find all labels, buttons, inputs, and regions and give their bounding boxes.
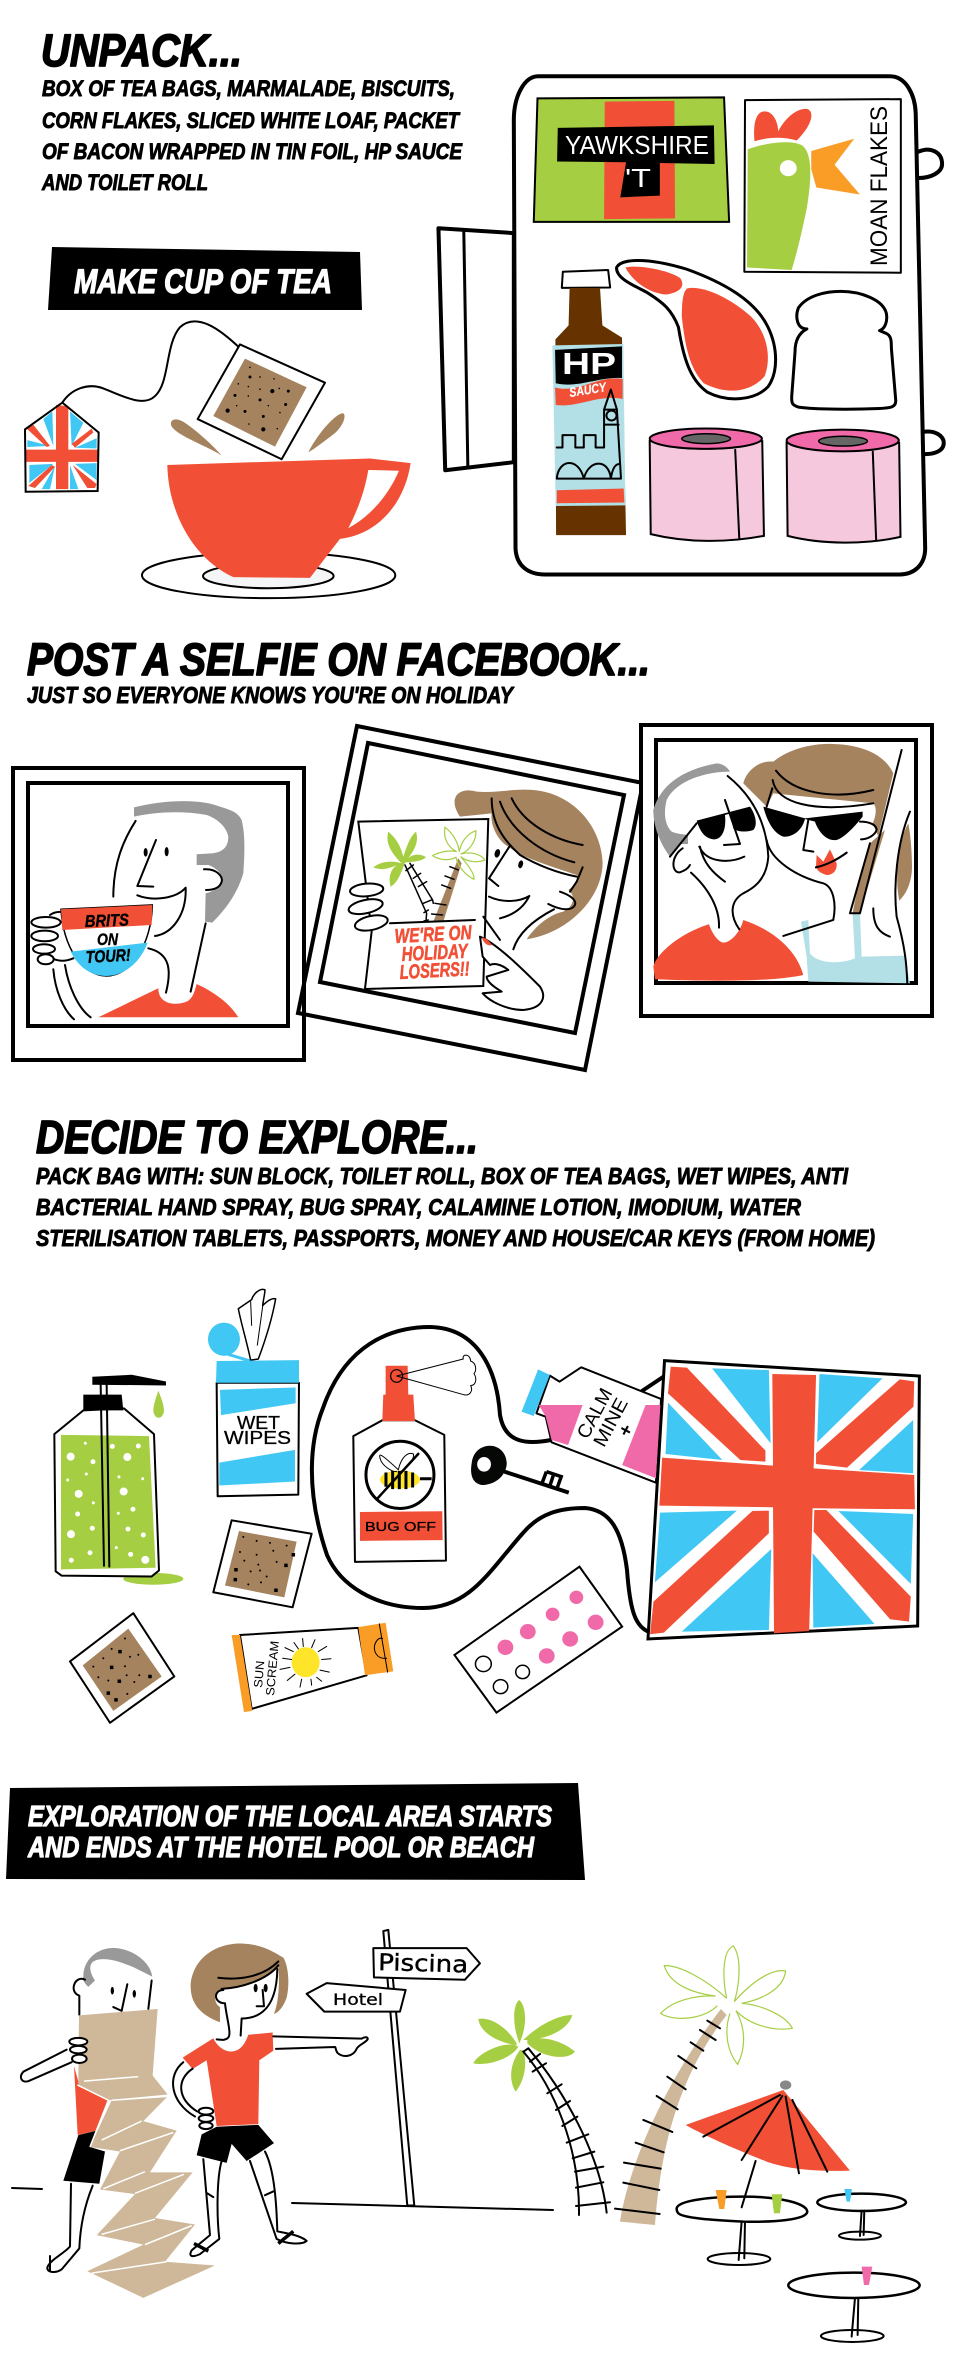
woman arms [173, 2036, 368, 2129]
heading: unpack: UNPACK... [41, 25, 242, 76]
icon: tea bag [198, 344, 325, 459]
illustration: tourists with map and signpost [21, 1930, 480, 2298]
subheading: selfie: JUST SO EVERYONE KNOWS YOU'RE ON HOLIDAY [27, 682, 515, 708]
man legs [47, 2184, 93, 2272]
table two [817, 2189, 906, 2240]
icon: sun cream tube [232, 1623, 393, 1712]
icon: union jack bag [648, 1361, 919, 1639]
photo: woman holding holiday card [298, 726, 643, 1070]
icon: hand sanitiser [54, 1375, 183, 1585]
icon: saucer [142, 552, 395, 598]
man head [83, 1948, 152, 1987]
suitcase body [514, 76, 925, 574]
icon: calamine lotion [522, 1367, 661, 1483]
speech line: looping outline from flag [312, 1327, 663, 1631]
woman top [801, 913, 910, 983]
cup slogan: TOUR! [85, 946, 131, 967]
woman shirt [183, 2033, 273, 2126]
woman hair [743, 744, 893, 837]
icon: tea splash left [171, 419, 222, 455]
man hand and arm [31, 912, 91, 1019]
table three [788, 2267, 920, 2342]
text block: unpack list [41, 76, 463, 195]
text block: unpack list: AND TOILET ROLL [41, 170, 208, 195]
icon: tea bag on floor [213, 1520, 312, 1607]
couple face lines [670, 750, 910, 983]
label: calm mine [573, 1385, 638, 1451]
label: wet wipes: WIPES [224, 1428, 291, 1448]
icon: house key [471, 1446, 569, 1493]
palm tree outline trunk [473, 2000, 610, 2215]
parasol [686, 2080, 850, 2207]
icon: spray bottle [353, 1355, 476, 1562]
signpost [307, 1930, 480, 2205]
label: calm mine: + [614, 1421, 638, 1441]
bottle: hp sauce [552, 270, 626, 535]
man hair [653, 763, 730, 857]
card message: WE'RE ON [394, 922, 473, 948]
man with map [21, 1948, 215, 2298]
box: yawkshire tea background [534, 97, 729, 222]
suitcase handle [438, 228, 514, 470]
man arm and hand [21, 2038, 87, 2082]
sign label: piscina: Piscina [378, 1950, 468, 1978]
icon: tea bag string [62, 321, 240, 403]
cup slogan: BRITS [84, 910, 130, 931]
label: yawkshire tea: 'T [625, 163, 651, 193]
banner: exploration of the local area: EXPLORATION OF THE LOCAL AREA STARTS [28, 1801, 553, 1833]
banner: make cup of tea: MAKE CUP OF TEA [74, 263, 332, 301]
heading: post a selfie: POST A SELFIE ON FACEBOOK... [27, 634, 650, 685]
label: yawkshire tea: YAWKSHIRE [565, 130, 709, 160]
illustration: cup of tea with tea bag [25, 321, 411, 598]
man sunglasses [697, 807, 756, 839]
icon: wet wipes [208, 1289, 299, 1496]
card message [394, 922, 473, 984]
text block: pack bag list [36, 1163, 875, 1251]
icon: union jack tea tag [25, 403, 99, 492]
label: wet wipes [224, 1413, 291, 1448]
man shirt [74, 2066, 108, 2135]
box: moan flakes [744, 99, 901, 273]
woman sunglasses [763, 807, 863, 840]
label: saucy: SAUCY [568, 379, 608, 400]
card message: LOSERS!! [399, 958, 470, 984]
text block: pack bag list: BACTERIAL HAND SPRAY, BUG SPRAY, CALAMINE LOTION, IMODIUM, WATER [36, 1194, 801, 1220]
photo: man with brits on tour cup [13, 768, 304, 1060]
cup slogan [84, 910, 131, 967]
banner: make cup of tea [48, 247, 362, 310]
icon: blister pack [454, 1567, 622, 1713]
icon: tea splash right [308, 413, 345, 452]
woman right hand over card [480, 917, 543, 1010]
photo: couple in sunglasses [641, 725, 932, 1016]
label: calm mine: MINE [590, 1395, 633, 1451]
ground line [12, 2188, 553, 2210]
illustration: open suitcase [438, 76, 944, 574]
woman legs [190, 2152, 307, 2256]
text block: pack bag list: PACK BAG WITH: SUN BLOCK, TOILET ROLL, BOX OF TEA BAGS, WET WIPES, ANTI [36, 1163, 849, 1189]
woman hair [455, 790, 603, 939]
illustration: bag items right [454, 1361, 919, 1713]
palm tree tan trunk [615, 1946, 792, 2225]
label: sun scream: SCREAM [263, 1640, 282, 1696]
text block: unpack list: OF BACON WRAPPED IN TIN FOIL, HP SAUCE [42, 139, 463, 164]
banner: exploration of the local area: AND ENDS AT THE HOTEL POOL OR BEACH [27, 1832, 535, 1864]
label: yawkshire tea [565, 130, 709, 193]
icon: tea bag lower left [70, 1613, 174, 1723]
man hair [134, 801, 244, 923]
food: bacon [617, 260, 776, 399]
palm trees on card [373, 827, 485, 923]
label: bug off: BUG OFF [365, 1519, 436, 1534]
man shirt [98, 984, 238, 1017]
folded map [77, 2009, 215, 2298]
food: toilet roll two [787, 430, 900, 543]
icon: red tea cup [167, 458, 411, 578]
illustration: bag items left [54, 1289, 476, 1723]
card message: HOLIDAY [401, 941, 469, 966]
man face lines [113, 821, 222, 993]
cup with flag bands [61, 905, 152, 976]
woman face lines [489, 798, 583, 949]
woman hair [191, 1944, 288, 2022]
table one [677, 2190, 807, 2265]
label: moan flakes: MOAN FLAKES [866, 106, 893, 266]
label: hp: HP [562, 346, 616, 381]
left hand fingers [347, 882, 389, 933]
food: sliced bread [792, 291, 896, 409]
woman pointing [173, 1944, 368, 2256]
text block: unpack list: CORN FLAKES, SLICED WHITE LOAF, PACKET [42, 108, 460, 133]
man shirt [653, 920, 803, 981]
banner: exploration of the local area [6, 1783, 585, 1880]
label: sun scream: SUN [251, 1660, 267, 1688]
cup slogan: ON [97, 930, 119, 949]
woman shorts [197, 2125, 274, 2163]
heading: decide to explore: DECIDE TO EXPLORE... [36, 1111, 478, 1163]
man shorts [63, 2131, 105, 2184]
suitcase clasps [918, 150, 944, 454]
label: wet wipes: WET [237, 1413, 280, 1433]
text block: unpack list: BOX OF TEA BAGS, MARMALADE, BISCUITS, [42, 76, 455, 101]
illustration: beach with palms and tables [473, 1946, 920, 2342]
sign label: hotel: Hotel [333, 1990, 383, 2009]
label: sun scream [251, 1640, 282, 1696]
holiday card [358, 819, 488, 989]
woman lips [816, 849, 837, 875]
food: toilet roll one [650, 429, 764, 541]
label: calm mine: CALM [573, 1385, 617, 1442]
